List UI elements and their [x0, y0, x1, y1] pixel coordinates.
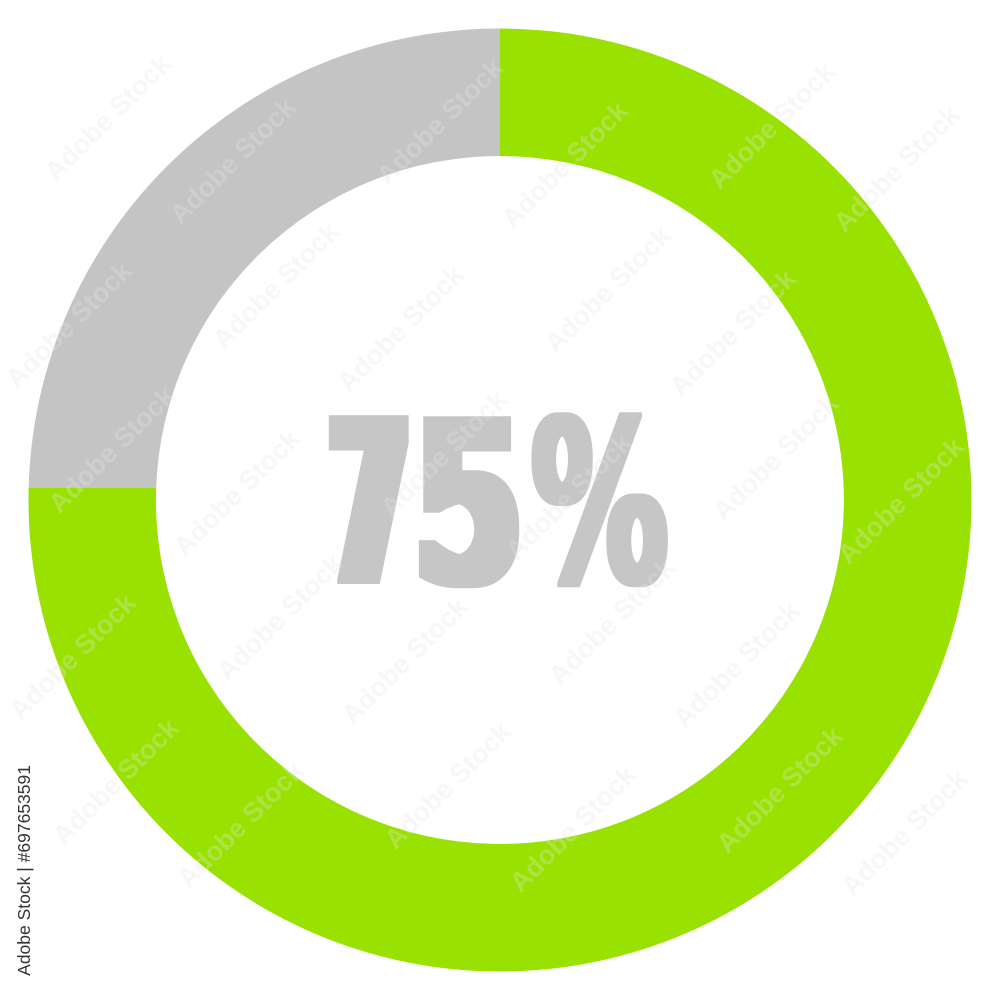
watermark pattern: Adobe Stock	[207, 216, 345, 355]
watermark pattern: Adobe Stock	[664, 263, 802, 402]
watermark pattern: Adobe Stock	[500, 427, 638, 566]
centre value: 75%: 5	[415, 374, 522, 637]
watermark pattern: Adobe Stock	[47, 712, 185, 851]
ring segment: remaining share (grey)	[29, 28, 500, 488]
watermark pattern: Adobe Stock	[504, 759, 642, 898]
watermark pattern: Adobe Stock	[168, 423, 306, 562]
watermark pattern: Adobe Stock	[828, 99, 966, 238]
watermark pattern: Adobe Stock	[371, 52, 509, 191]
watermark pattern: Adobe Stock	[4, 587, 142, 726]
watermark pattern: Adobe Stock	[707, 388, 845, 527]
watermark pattern: Adobe Stock	[668, 595, 806, 734]
watermark pattern: Adobe Stock	[39, 48, 177, 187]
watermark pattern: Adobe Stock	[211, 548, 349, 687]
watermark pattern: Adobe Stock	[539, 220, 677, 359]
watermark pattern: Adobe Stock	[332, 259, 470, 398]
centre value: 75%: 7	[334, 373, 405, 636]
watermark pattern: Adobe Stock	[711, 720, 849, 859]
watermark pattern: Adobe Stock	[832, 431, 970, 570]
watermark pattern: Adobe Stock	[703, 56, 841, 195]
watermark pattern: Adobe Stock	[496, 95, 634, 234]
watermark pattern: Adobe Stock	[379, 716, 517, 855]
watermark pattern: Adobe Stock	[164, 91, 302, 230]
image ID caption: Adobe Stock | #697653591	[14, 765, 34, 976]
watermark pattern: Adobe Stock	[172, 755, 310, 894]
watermark pattern: Adobe Stock	[836, 763, 974, 902]
centre value: 75%: %	[531, 374, 668, 636]
centre value: 75%	[334, 373, 668, 637]
watermark pattern: Adobe Stock	[375, 384, 513, 523]
watermark pattern: Adobe Stock	[543, 552, 681, 691]
watermark pattern: Adobe Stock	[43, 380, 181, 519]
watermark pattern: Adobe Stock	[0, 255, 138, 394]
watermark pattern: Adobe Stock	[336, 591, 474, 730]
